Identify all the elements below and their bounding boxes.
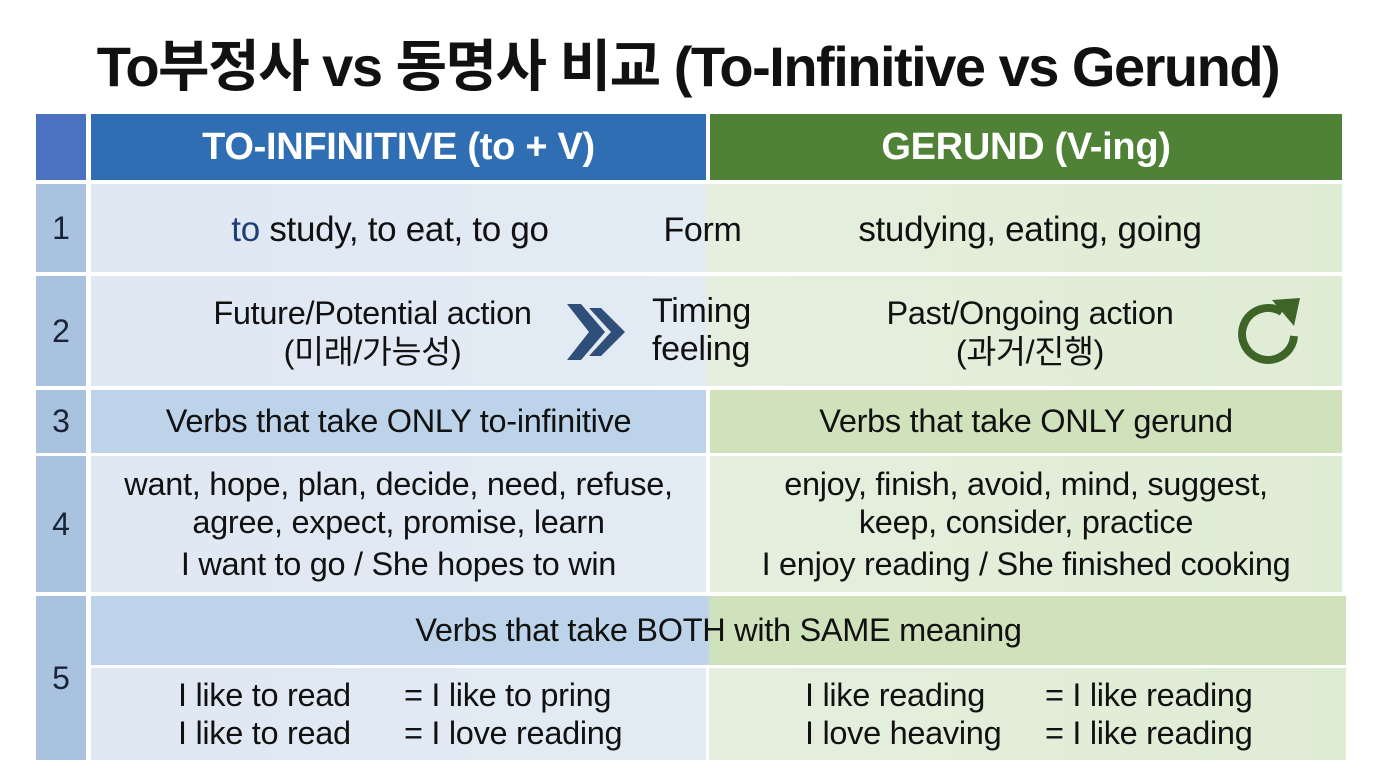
text: 4 (52, 506, 70, 542)
row5 right examples: = I like reading (1045, 677, 1252, 713)
header number cell (36, 114, 86, 180)
row separators (91, 272, 1346, 276)
row5 left examples: I like to read (178, 715, 351, 751)
row5 left examples: = I love reading (404, 715, 622, 751)
row2 left (213, 295, 532, 370)
row5 right examples: I love heaving (805, 715, 1001, 751)
background right greenish (706, 184, 1346, 760)
row5 left examples: = I like to pring (404, 677, 611, 713)
row4 left: want, hope, plan, decide, need, refuse, (124, 466, 673, 502)
row3 right header (710, 390, 1342, 453)
row5 right examples (805, 677, 1252, 751)
row4 right: I enjoy reading / She finished cooking (762, 546, 1290, 582)
row2 right: Past/Ongoing action (886, 295, 1174, 331)
row4 left (124, 466, 673, 582)
row4 right (762, 466, 1290, 582)
row5 right examples: = I like reading (1045, 715, 1252, 751)
row5 left examples: I like to read (178, 677, 351, 713)
row4 left: I want to go / She hopes to win (181, 546, 616, 582)
row2 left: (미래/가능성) (284, 334, 461, 370)
row1 left: to study, to eat, to go (231, 210, 549, 249)
icon: double chevron (567, 304, 625, 360)
row1 right: studying, eating, going (858, 210, 1202, 249)
row5 right examples: I like reading (805, 677, 985, 713)
row2 middle label (652, 292, 751, 368)
text: 2 (52, 312, 70, 348)
row3 left header: Verbs that take ONLY to-infinitive (166, 403, 631, 439)
text: 3 (52, 403, 70, 439)
row5 header (91, 596, 1346, 665)
row numbers: 1 (52, 210, 70, 246)
row3 left header (91, 390, 706, 453)
row4 right: enjoy, finish, avoid, mind, suggest, (784, 466, 1268, 502)
header: to-infinitive: TO-INFINITIVE (to + V) (202, 126, 595, 168)
header: to-infinitive (91, 114, 706, 180)
row4 left: agree, expect, promise, learn (192, 504, 605, 540)
row2 right (886, 295, 1174, 370)
background left bluish (91, 184, 708, 760)
row5 header: Verbs that take BOTH with SAME meaning (415, 612, 1022, 648)
row2 middle label: Timing (652, 292, 751, 330)
text: 5 (52, 660, 70, 696)
row3 right header: Verbs that take ONLY gerund (819, 403, 1233, 439)
icon: refresh (1238, 298, 1300, 364)
row4 right: keep, consider, practice (859, 504, 1193, 540)
row2 left: Future/Potential action (213, 295, 532, 331)
row3/4 white line (91, 453, 1346, 456)
row5 left examples (178, 677, 622, 751)
row numbers (36, 184, 86, 272)
header: gerund: GERUND (V-ing) (881, 126, 1171, 168)
row2 middle label: feeling (652, 330, 750, 368)
title: To부정사 vs 동명사 비교 (To-Infinitive vs Gerund) (97, 34, 1279, 98)
row1 middle label: Form (663, 211, 742, 249)
row2 right: (과거/진행) (956, 334, 1104, 370)
header: gerund (710, 114, 1342, 180)
